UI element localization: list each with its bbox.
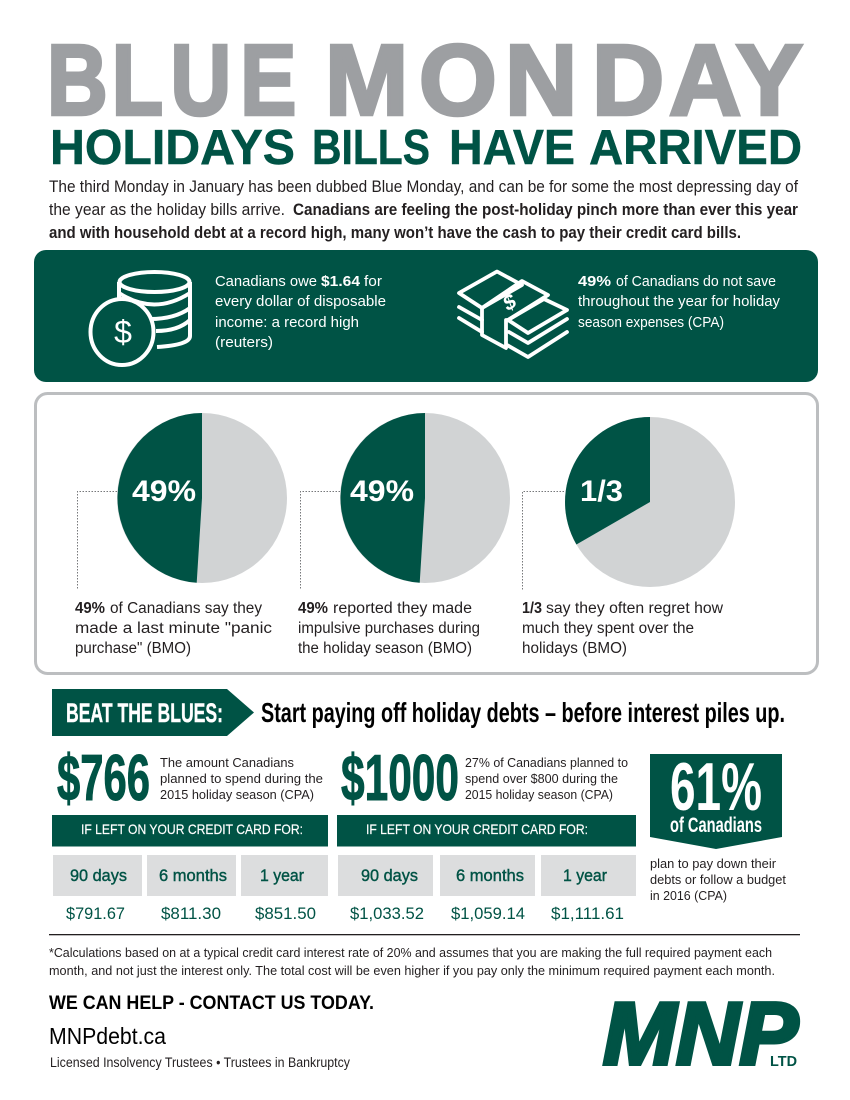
text: debt per dollar: for: [364, 273, 382, 290]
table cells: left periods: 6 months: [159, 867, 227, 885]
intro paragraph: [49, 178, 799, 242]
amounts: right: $1,059.14: [451, 904, 525, 923]
amounts: left: $851.50: [255, 904, 316, 923]
footnote: [49, 946, 775, 978]
pie chart: spending regret 1/3: [565, 417, 735, 587]
arrow banner: beat the blues: [52, 689, 254, 736]
text: holiday savings: of Canadians do not save: [616, 273, 776, 290]
icon: dollar sign on bills: $: [501, 289, 519, 317]
pie chart: spending regret 1/3: 1/3: [580, 475, 623, 508]
logo: MNP LTD: LTD: [770, 1053, 797, 1070]
text: holiday savings: throughout the year for holiday: [578, 293, 780, 310]
caption: regret: 1/3: [522, 600, 542, 617]
stat: $766: The amount Canadians: [160, 755, 294, 770]
caption: regret: [522, 600, 724, 657]
caption: impulsive purchases: impulsive purchases during: [298, 620, 480, 637]
caption: panic purchase: [75, 600, 272, 657]
licensing line: Licensed Insolvency Trustees • Trustees in Bankruptcy: [50, 1055, 350, 1070]
table header: right: IF LEFT ON YOUR CREDIT CARD FOR:: [366, 821, 588, 837]
amounts: right: [350, 904, 624, 923]
text: debt per dollar: income: a record high: [215, 314, 359, 331]
amounts: left: [66, 904, 316, 923]
stat: $1000: 27% of Canadians planned to: [465, 755, 628, 770]
intro paragraph: Canadians are feeling the post-holiday pinch more than ever this year: [293, 201, 799, 219]
arrow banner: beat the blues: BEAT THE BLUES:: [66, 698, 223, 728]
text: plan to pay down: [650, 856, 786, 903]
title: Blue Monday: MONDAY: [325, 24, 803, 136]
amounts: left: $811.30: [161, 904, 221, 923]
table cells: right periods: 1 year: [563, 867, 607, 885]
intro paragraph: The third Monday in January has been dubbed Blue Monday, and can be for some the most depressing day of: [49, 178, 798, 196]
caption: impulsive purchases: reported they made: [333, 600, 472, 617]
icon: coin stack: [90, 272, 190, 365]
pie chart: impulsive purchases 49%: 49%: [350, 475, 414, 508]
stat: $766: planned to spend during the: [160, 771, 323, 786]
caption: regret: holidays (BMO): [522, 640, 627, 657]
footnote: *Calculations based on at a typical credit card interest rate of 20% and assumes that you are making the full required payment each: [49, 946, 772, 960]
caption: panic purchase: of Canadians say they: [110, 600, 262, 617]
table header: right: [337, 815, 636, 846]
table cells: left periods: 90 days: [70, 867, 127, 885]
subtitle: Holidays Bills Have Arrived: HAVE: [449, 121, 575, 175]
subtitle: Holidays Bills Have Arrived: ARRIVED: [589, 121, 802, 175]
subtitle: Holidays Bills Have Arrived: BILLS: [312, 121, 430, 175]
callout: 61% of Canadians: of Canadians: [670, 814, 762, 837]
title: Blue Monday: BLUE: [47, 24, 296, 136]
caption: regret: say they often regret how: [546, 600, 724, 617]
text: debt per dollar: every dollar of disposable: [215, 293, 386, 310]
table header: left: IF LEFT ON YOUR CREDIT CARD FOR:: [81, 821, 303, 837]
intro paragraph: and with household debt at a record high, many won’t have the cash to pay their credit card bills.: [49, 224, 741, 242]
text: plan to pay down: debts or follow a budget: [650, 872, 786, 887]
amounts: left: $791.67: [66, 904, 125, 923]
panel: debt facts: [34, 250, 818, 382]
table cells: left periods: 1 year: [260, 867, 304, 885]
table cells: right periods: 6 months: [456, 867, 524, 885]
table cells: left periods: [53, 855, 328, 896]
footnote: month, and not just the interest only. The total cost will be even higher if you pay only the minimum required payment each month.: [49, 964, 775, 978]
pie chart: panic purchase 49%: 49%: [132, 475, 196, 508]
callout: 61% of Canadians: 61%: [670, 749, 762, 825]
website: MNPdebt.ca: [49, 1023, 166, 1049]
stat: $1000: 2015 holiday season (CPA): [465, 787, 613, 802]
text: plan to pay down: plan to pay down their: [650, 856, 777, 871]
callout: 61% of Canadians: [650, 749, 782, 849]
table header: left: [52, 815, 328, 846]
text: holiday savings: [578, 273, 780, 331]
logo: MNP LTD: MNP: [603, 984, 798, 1083]
caption: impulsive purchases: 49%: [298, 600, 328, 617]
table cells: right periods: 90 days: [361, 867, 418, 885]
text: debt per dollar: (reuters): [215, 334, 273, 351]
stat: $1000: [341, 741, 628, 814]
intro paragraph: the year as the holiday bills arrive.: [49, 201, 285, 219]
table cells: right periods: [338, 855, 636, 896]
caption: regret: much they spent over the: [522, 620, 694, 637]
text: plan to pay down: in 2016 (CPA): [650, 888, 727, 903]
text: debt per dollar: $1.64: [321, 273, 361, 290]
text: debt per dollar: Canadians owe: [215, 273, 317, 290]
icon: stack of bills: [459, 272, 567, 357]
pie chart: panic purchase 49%: [117, 413, 287, 583]
caption: panic purchase: purchase" (BMO): [75, 640, 191, 657]
text: debt per dollar: [215, 273, 386, 351]
caption: panic purchase: 49%: [75, 600, 105, 617]
contact heading: WE CAN HELP - CONTACT US TODAY.: [49, 993, 374, 1014]
caption: impulsive purchases: [298, 600, 480, 657]
text: holiday savings: 49%: [578, 273, 611, 290]
subtitle: Holidays Bills Have Arrived: [50, 121, 802, 175]
stat: $766: [57, 741, 323, 814]
stat: $766: 2015 holiday season (CPA): [160, 787, 314, 802]
amounts: right: $1,033.52: [350, 904, 424, 923]
stat: $766: $766: [57, 741, 150, 814]
text: holiday savings: season expenses (CPA): [578, 314, 724, 331]
pie chart: impulsive purchases 49%: [340, 413, 510, 583]
caption: impulsive purchases: the holiday season (BMO): [298, 640, 472, 657]
subtitle: Holidays Bills Have Arrived: HOLIDAYS: [50, 121, 295, 175]
caption: panic purchase: made a last minute "panic: [75, 620, 272, 637]
panel: survey pie charts: [36, 394, 818, 674]
stat: $1000: spend over $800 during the: [465, 771, 618, 786]
stat: $1000: $1000: [341, 741, 459, 814]
icon: dollar sign on coin: $: [114, 314, 132, 350]
amounts: right: $1,111.61: [551, 904, 624, 923]
title: Blue Monday: [47, 24, 803, 136]
